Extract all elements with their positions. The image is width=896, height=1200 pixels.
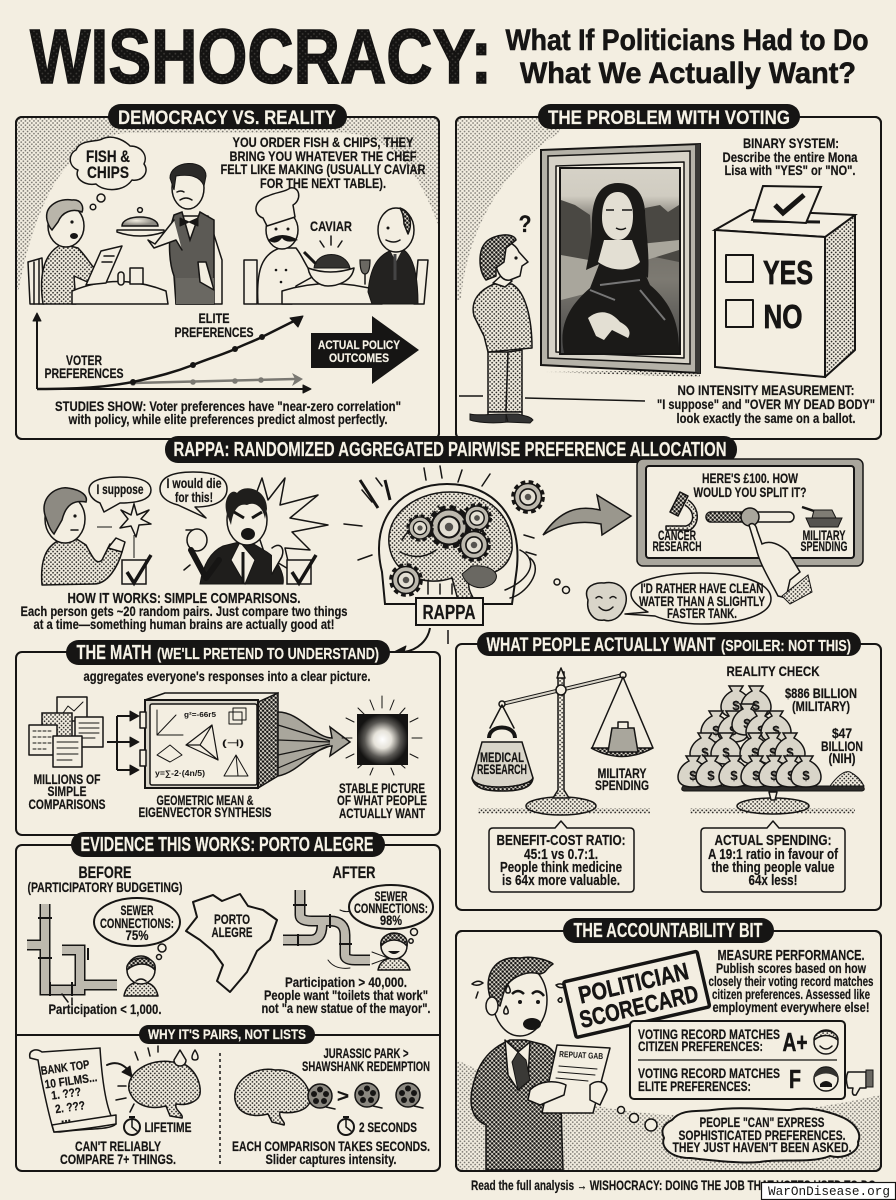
thought bubble: fish and chips: [70, 137, 146, 210]
panel: the accountability bit: [456, 918, 881, 1171]
icon: stable picture starburst: [342, 696, 422, 775]
title: WISHOCRACY:: [30, 14, 492, 100]
illustration: money bag pile: $: [786, 745, 794, 760]
text: restaurant analogy: FOR THE NEXT TABLE).: [260, 176, 386, 191]
illustration: money bag pile: $: [712, 723, 720, 738]
callout: actual spending: ACTUAL SPENDING:: [714, 833, 832, 849]
text: binary system: Lisa with "YES" or "NO".: [724, 162, 856, 178]
subtitle: [506, 24, 868, 90]
thought bubble: sewer 75%: [94, 898, 180, 960]
speech bubble: I suppose: [89, 477, 151, 512]
text: no intensity measurement: look exactly the same on a ballot.: [676, 410, 856, 426]
callout: benefit-cost ratio: is 64x more valuable.: [502, 873, 620, 889]
illustration: math machine: (⊣): [222, 738, 244, 748]
panel: democracy vs reality: [16, 104, 439, 439]
heading: (SPOILER: NOT THIS): [721, 638, 851, 655]
illustration: money bag pile: $: [752, 698, 760, 713]
arrow: actual policy outcomes: [311, 316, 419, 384]
callout: benefit-cost ratio: BENEFIT-COST RATIO:: [496, 833, 626, 849]
heading: WHAT PEOPLE ACTUALLY WANT: [486, 635, 716, 656]
illustration: math machine: [140, 693, 278, 788]
arrow: actual policy outcomes: ACTUAL POLICY: [318, 338, 400, 352]
illustration: money bag pile: [678, 686, 864, 814]
row: citizen preferences A+: A+: [782, 1027, 808, 1057]
illustration: money bag pile: $: [743, 716, 751, 731]
text: millions of comparisons: COMPARISONS: [28, 797, 106, 812]
section: rappa: [20, 436, 863, 658]
text: no intensity measurement: NO INTENSITY MEASUREMENT:: [678, 382, 854, 398]
thought bubble: sewer 75%: CONNECTIONS:: [100, 916, 174, 931]
heading: THE ACCOUNTABILITY BIT: [574, 920, 762, 942]
text: no intensity measurement: [657, 382, 875, 426]
illustration: money bag pile: $: [722, 745, 730, 760]
line chart: voter vs elite preferences: PREFERENCES: [44, 366, 124, 381]
illustration: money bag pile: $: [802, 768, 810, 783]
illustration: money bag pile: $: [730, 768, 738, 783]
illustration: money bag pile: $: [770, 768, 778, 783]
line chart: voter vs elite preferences: [33, 311, 311, 393]
text: studies show: STUDIES SHOW: Voter preferences have "near-zero correlation": [55, 398, 401, 414]
illustration: math machine: y=∑-2·(4n/5): [155, 769, 205, 778]
panel: slider allocation: CANCER: [658, 528, 696, 543]
illustration: chef and caviar: CAVIAR: [310, 218, 352, 234]
panel: the math: [16, 640, 440, 835]
icon: two seconds clock: 2 SECONDS: [359, 1119, 417, 1135]
text: geometric mean: EIGENVECTOR SYNTHESIS: [138, 805, 272, 820]
text: each comparison takes seconds: EACH COMPARISON TAKES SECONDS.: [232, 1138, 430, 1154]
text: binary system: BINARY SYSTEM:: [743, 135, 839, 151]
map: brazil porto alegre: ALEGRE: [212, 925, 252, 940]
row: citizen preferences A+: [638, 1026, 838, 1057]
callout: benefit-cost ratio: [489, 821, 634, 892]
speech bubble: clean water: [625, 573, 771, 624]
panel: the problem with voting: [456, 104, 881, 535]
callout: actual spending: the thing people value: [712, 860, 834, 876]
thought bubble: fish and chips: CHIPS: [87, 163, 129, 182]
text: stable picture: OF WHAT PEOPLE: [337, 793, 427, 808]
arrows: documents into machine: [107, 711, 139, 775]
icon: thumbs down: [846, 1070, 873, 1095]
text: after heading: AFTER: [332, 863, 376, 882]
slider: [706, 508, 794, 526]
illustration: ballot box yes no: NO: [764, 298, 802, 335]
illustration: overloaded brain: [116, 1046, 200, 1118]
text: spending labels: $47: [832, 725, 852, 741]
illustration: ballot box yes no: [715, 186, 855, 377]
speech bubble: clean water: I'D RATHER HAVE CLEAN: [640, 580, 764, 596]
illustration: money bag pile: $: [707, 768, 715, 783]
illustration: money bag pile: $: [701, 745, 709, 760]
text: before heading: [28, 863, 182, 895]
illustration: calm brain and film reels: [235, 1069, 423, 1125]
text: cant reliably compare: COMPARE 7+ THINGS.: [60, 1151, 176, 1167]
icon: stack of comparison documents: [29, 697, 103, 767]
text: measure performance: [708, 948, 874, 1015]
heading: DEMOCRACY VS. REALITY: [118, 108, 336, 129]
heading: (WE'LL PRETEND TO UNDERSTAND): [157, 646, 379, 663]
text: participation after: [262, 974, 430, 1016]
heading: EVIDENCE THIS WORKS: PORTO ALEGRE: [80, 834, 374, 856]
text: each comparison takes seconds: Slider captures intensity.: [266, 1151, 396, 1167]
icon: lifetime clock: LIFETIME: [144, 1119, 192, 1135]
heading: [66, 640, 390, 665]
arrow: rappa to math: [394, 628, 448, 658]
thought bubble: fish and chips: FISH &: [86, 147, 130, 166]
badge: waterondisease url: WarOnDisease.org: [768, 1184, 890, 1199]
text: before heading: (PARTICIPATORY BUDGETING): [28, 879, 182, 895]
text: participation after: Participation > 40,000.: [285, 974, 407, 990]
text: participation after: not "a new statue of the mayor".: [262, 1000, 430, 1016]
text: aggregates: aggregates everyone's responses into a clear picture.: [84, 668, 370, 684]
callout: benefit-cost ratio: People think medicine: [500, 860, 622, 876]
thought bubble: sewer 75%: SEWER: [120, 903, 154, 918]
illustration: rank scroll: [30, 1048, 132, 1132]
stamp: politician scorecard: SCORECARD: [577, 980, 701, 1034]
text: restaurant analogy: BRING YOU WHATEVER THE CHEF: [230, 149, 416, 164]
thought bubble: sophisticated preferences: PEOPLE "CAN" EXPRESS: [700, 1114, 824, 1130]
text: cant reliably compare: [60, 1138, 176, 1167]
subheading: why pairs not lists: WHY IT'S PAIRS, NOT LISTS: [148, 1026, 306, 1042]
text: participation before: Participation < 1,000.: [48, 1001, 162, 1017]
heading: RAPPA: RANDOMIZED AGGREGATED PAIRWISE PREFERENCE ALLOCATION: [174, 439, 726, 461]
illustration: ballot box yes no: YES: [763, 254, 813, 291]
text: spending labels: (MILITARY): [792, 698, 850, 714]
stamp: politician scorecard: [563, 951, 710, 1038]
speech bubble: I would die for this: I would die: [166, 476, 222, 491]
illustration: money bag pile: $: [729, 723, 737, 738]
illustration: balance scale: SPENDING: [595, 778, 649, 793]
callout: actual spending: [701, 821, 845, 892]
illustration: confused person viewing painting: ?: [518, 211, 532, 238]
illustration: confused person viewing painting: [459, 211, 645, 423]
speech bubble: clean water: FASTER TANK.: [667, 605, 737, 621]
illustration: happy small brain: [554, 579, 626, 621]
row: elite preferences F: ELITE PREFERENCES:: [638, 1078, 751, 1094]
illustration: sweating politician: [471, 957, 610, 1170]
illustration: happy child: [378, 933, 410, 970]
arrow: machine to picture: [278, 712, 350, 776]
illustration: person saying I suppose: [42, 488, 151, 585]
illustration: money bag pile: $: [757, 723, 765, 738]
line chart: voter vs elite preferences: ELITE: [198, 311, 230, 326]
text: jurassic park vs shawshank: [302, 1046, 430, 1074]
callout: actual spending: A 19:1 ratio in favour of: [708, 847, 838, 863]
illustration: rank scroll: ...: [60, 1110, 71, 1126]
illustration: elite man with wine: [360, 208, 428, 304]
heading: THE MATH: [76, 642, 152, 664]
text: how it works: at a time—something human brains are actually good at!: [34, 616, 334, 632]
text: spending labels: (NIH): [828, 750, 856, 766]
speech bubble: I suppose: I suppose: [96, 482, 144, 497]
text: stable picture: STABLE PICTURE: [339, 781, 425, 796]
label: RAPPA box: RAPPA: [422, 602, 476, 624]
illustration: sad child: [124, 956, 158, 996]
speech bubble: I would die for this: for this!: [175, 490, 213, 505]
illustration: money bag pile: $: [787, 768, 795, 783]
map: brazil porto alegre: [186, 894, 277, 992]
icon: pointing hand: [749, 524, 812, 604]
text: geometric mean: GEOMETRIC MEAN &: [156, 793, 254, 808]
text: participation after: People want "toilets that work": [264, 987, 428, 1003]
text: jurassic park vs shawshank: SHAWSHANK REDEMPTION: [302, 1059, 430, 1074]
panel: slider allocation: HERE'S £100. HOW: [702, 470, 799, 486]
text: cant reliably compare: CAN'T RELIABLY: [75, 1138, 161, 1154]
icon: medical research weight: [472, 728, 533, 791]
illustration: money bag pile: $: [732, 698, 740, 713]
arrow: brain to slider: [543, 495, 631, 535]
row: citizen preferences A+: CITIZEN PREFERENCES:: [638, 1038, 763, 1054]
panel: slider allocation: RESEARCH: [652, 539, 702, 554]
panel: slider allocation: MILITARY: [802, 528, 846, 543]
text: binary system: [722, 135, 858, 178]
illustration: rappa brain machine: [344, 466, 543, 604]
icon: two seconds clock: [338, 1117, 417, 1135]
illustration: money bag pile: $: [751, 745, 759, 760]
illustration: working pipes: [283, 890, 388, 968]
illustration: money bag pile: $: [689, 768, 697, 783]
text: how it works: HOW IT WORKS: SIMPLE COMPARISONS.: [68, 590, 300, 607]
icon: tank: [802, 507, 842, 527]
callout: benefit-cost ratio: 45:1 vs 0.7:1.: [524, 847, 598, 863]
scorecard table: [630, 1021, 845, 1099]
illustration: rank scroll: 2. ???: [54, 1098, 86, 1116]
panel: what people actually want: [456, 632, 881, 910]
thought bubble: sewer 98%: SEWER: [374, 889, 408, 904]
illustration: money bag pile: $: [769, 745, 777, 760]
illustration: balance scale: MILITARY: [598, 766, 646, 781]
text: spending labels: $886 BILLION: [785, 685, 857, 701]
text: each comparison takes seconds: [232, 1138, 430, 1167]
text: millions of comparisons: SIMPLE: [48, 784, 86, 799]
illustration: diner with menu: [28, 200, 168, 304]
panel: slider allocation: WOULD YOU SPLIT IT?: [694, 484, 806, 500]
speech bubble: clean water: WATER THAN A SLIGHTLY: [639, 593, 765, 609]
text: millions of comparisons: [28, 772, 106, 812]
heading: [71, 832, 385, 857]
icon: lifetime clock: [124, 1117, 192, 1135]
text: studies show: with policy, while elite preferences predict almost perfectly.: [68, 411, 388, 427]
text: millions of comparisons: MILLIONS OF: [34, 772, 100, 787]
text: restaurant analogy: [220, 135, 426, 191]
illustration: balance scale: [472, 668, 653, 815]
illustration: chef and caviar: [244, 188, 382, 304]
icon: microscope: [666, 492, 697, 530]
row: citizen preferences A+: VOTING RECORD MATCHES: [638, 1026, 780, 1042]
illustration: broken pipes: [27, 904, 117, 1004]
heading: [563, 918, 774, 943]
stamp: politician scorecard: POLITICIAN: [576, 958, 691, 1010]
thought bubble: sophisticated preferences: [618, 1106, 859, 1163]
subtitle: What We Actually Want?: [520, 57, 856, 90]
line chart: voter vs elite preferences: VOTER: [66, 353, 102, 368]
thought bubble: sewer 98%: CONNECTIONS:: [354, 901, 428, 916]
arrow: actual policy outcomes: OUTCOMES: [329, 351, 389, 365]
text: restaurant analogy: FELT LIKE MAKING (USUALLY CAVIAR: [220, 162, 426, 177]
icon: medical research weight: MEDICAL: [480, 750, 524, 765]
icon: medical research weight: RESEARCH: [477, 762, 527, 777]
heading: [477, 632, 861, 656]
panel: slider allocation: [637, 459, 863, 566]
thought bubble: sewer 75%: 75%: [126, 928, 148, 943]
map: brazil porto alegre: PORTO: [214, 912, 250, 927]
thought bubble: sewer 98%: 98%: [380, 913, 402, 928]
text: stable picture: ACTUALLY WANT: [339, 806, 426, 821]
text: binary system: Describe the entire Mona: [722, 149, 858, 165]
text: restaurant analogy: YOU ORDER FISH & CHIPS, THEY: [232, 135, 414, 150]
label: RAPPA box: [416, 598, 483, 625]
text: reality check: REALITY CHECK: [726, 663, 820, 679]
illustration: calm brain and film reels: >: [337, 1086, 349, 1106]
text: jurassic park vs shawshank: JURASSIC PARK >: [324, 1046, 409, 1061]
illustration: money bag pile: $: [752, 768, 760, 783]
text: how it works: Each person gets ~20 random pairs. Just compare two things: [20, 603, 348, 619]
line chart: voter vs elite preferences: PREFERENCES: [174, 325, 254, 340]
text: how it works: [20, 590, 348, 632]
illustration: rank scroll: BANK TOP: [40, 1057, 90, 1078]
text: geometric mean: [138, 793, 272, 820]
illustration: money bag pile: $: [772, 723, 780, 738]
text: studies show: [55, 398, 401, 427]
row: elite preferences F: F: [789, 1064, 801, 1094]
heading: THE PROBLEM WITH VOTING: [548, 108, 790, 129]
text: spending labels: BILLION: [821, 738, 863, 754]
text: stable picture: [337, 781, 427, 821]
thought bubble: sewer 98%: [349, 885, 433, 943]
text: before heading: BEFORE: [78, 863, 132, 882]
row: elite preferences F: VOTING RECORD MATCHES: [638, 1065, 780, 1081]
illustration: mona lisa painting: [541, 144, 700, 377]
panel: evidence porto alegre: [16, 832, 440, 1171]
illustration: rank scroll: 1. ???: [50, 1085, 82, 1103]
illustration: waiter with cloche: [117, 163, 222, 304]
panel: slider allocation: SPENDING: [800, 539, 848, 554]
illustration: rank scroll: 10 FILMS...: [44, 1070, 98, 1091]
row: elite preferences F: [638, 1064, 838, 1094]
illustration: sweating politician: REPUAT GAB: [559, 1049, 603, 1061]
text: spending labels: [785, 685, 863, 766]
heading: [165, 436, 737, 463]
speech bubble: I would die for this: [160, 472, 227, 518]
illustration: angry person would die: [182, 478, 328, 584]
callout: actual spending: 64x less!: [748, 873, 798, 889]
illustration: math machine: g²=-66r5: [184, 712, 216, 719]
